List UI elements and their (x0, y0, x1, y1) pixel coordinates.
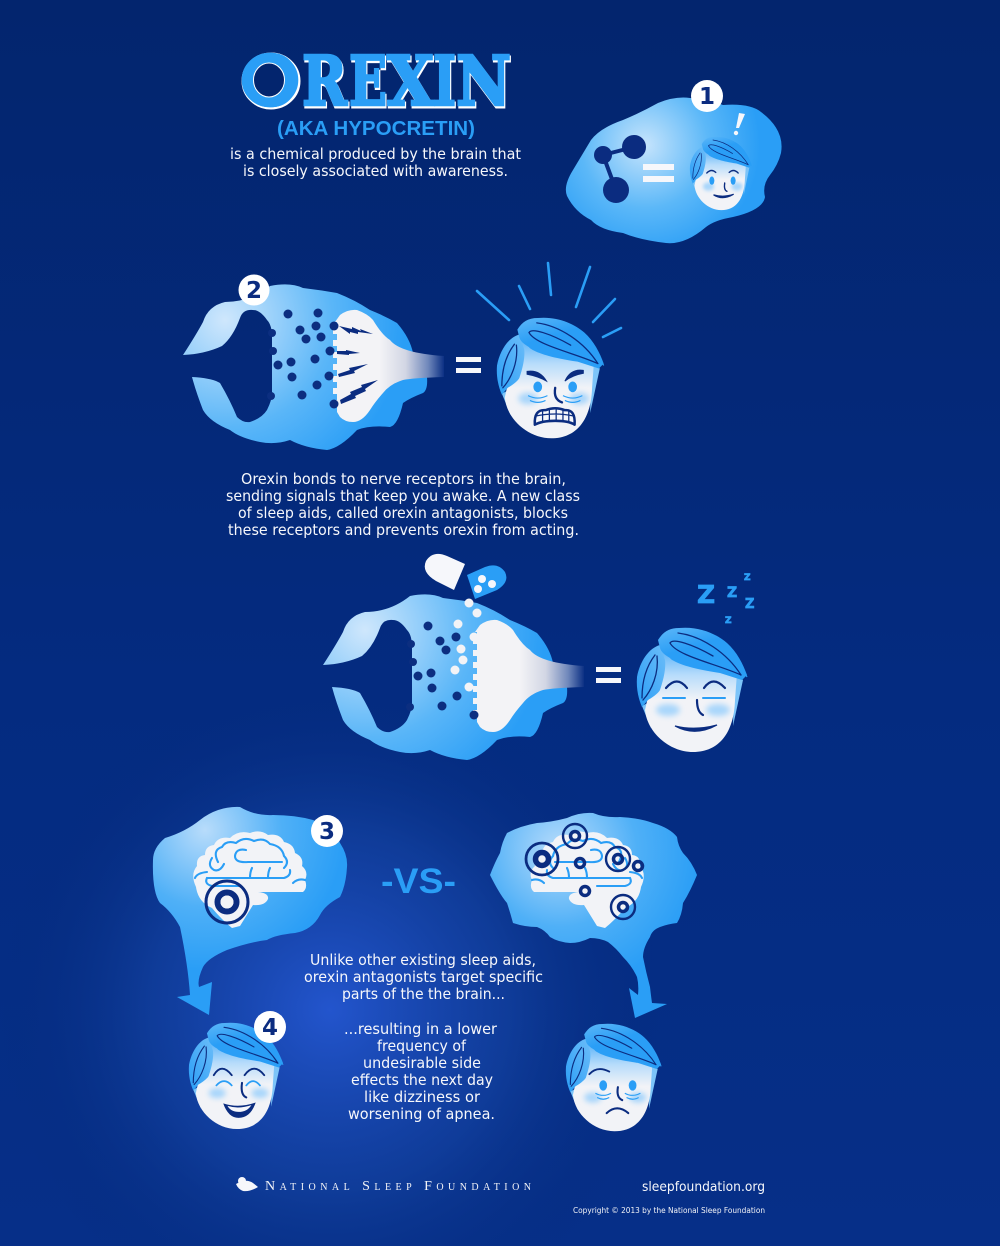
explanation text: these receptors and prevents orexin from acting. (228, 521, 579, 539)
icon: sleeping Zs: Z (744, 573, 751, 583)
copyright: Copyright © 2013 by the National Sleep Foundation (573, 1206, 765, 1215)
icon: wired awake face (497, 318, 604, 438)
side effects text: orexin antagonists target specific (304, 968, 543, 986)
side effects text: worsening of apnea. (348, 1105, 495, 1123)
side effects text: undesirable side (363, 1054, 481, 1072)
website: sleepfoundation.org (642, 1179, 765, 1195)
title: E (349, 42, 387, 122)
panel: targeted brain (153, 807, 347, 1015)
vs label: -VS- (381, 862, 456, 901)
icon: unhappy face (566, 1024, 661, 1131)
panel: scattered brain (490, 813, 697, 1018)
icon: orexin molecule (594, 135, 646, 203)
icon: sleeping Zs: Z (725, 616, 732, 626)
title: E (350, 44, 388, 124)
icon: alarm rays (477, 263, 621, 337)
icon: alert face (690, 137, 752, 210)
panel: step 1 blob (566, 80, 782, 243)
icon: brain with many targets (526, 824, 644, 928)
title: I (433, 42, 456, 122)
blocked orexin dots (406, 622, 478, 720)
badge 4: 4 (262, 1015, 278, 1041)
intro text: is closely associated with awareness. (243, 162, 508, 180)
side effects text: Unlike other existing sleep aids, (310, 951, 536, 969)
explanation text: sending signals that keep you awake. A new class (226, 487, 580, 505)
equals sign 2 (456, 357, 481, 373)
explanation text: Orexin bonds to nerve receptors in the brain, (241, 470, 566, 488)
panel: step 2 synapse (183, 284, 444, 450)
orexin dots (267, 308, 338, 408)
badge 3: 3 (319, 819, 335, 845)
foundation name: National Sleep Foundation (265, 1179, 531, 1194)
title: X (388, 44, 435, 124)
title: O (243, 42, 298, 122)
badge 3 (311, 815, 343, 847)
side effects text: frequency of (377, 1037, 467, 1055)
badge 4 (254, 1011, 286, 1043)
title (243, 42, 512, 124)
icon: sleeping Zs: Z (745, 597, 754, 612)
side effects text: ...resulting in a lower (344, 1020, 498, 1038)
lightning bolts (337, 326, 378, 404)
equals sign 1 (643, 164, 674, 182)
title: N (456, 42, 511, 122)
title: X (387, 42, 434, 122)
antagonist dots (450, 598, 482, 692)
icon: brain with one target (193, 831, 306, 928)
intro text: is a chemical produced by the brain that (230, 145, 521, 163)
explanation text: of sleep aids, called orexin antagonists, blocks (238, 504, 568, 522)
logo: sleeping figure (236, 1177, 258, 1191)
equals sign 3 (596, 667, 621, 683)
title: R (302, 42, 347, 122)
icon: sleeping Zs (697, 573, 754, 626)
title: N (457, 44, 512, 124)
subtitle: (AKA HYPOCRETIN) (277, 118, 475, 140)
icon: exclamation mark (734, 113, 745, 135)
title: I (434, 44, 457, 124)
badge 1 (691, 80, 723, 112)
badge 1: 1 (699, 84, 715, 110)
side effects text (304, 951, 543, 1123)
icon: sleepy face (637, 628, 747, 752)
icon: happy face (189, 1023, 283, 1129)
icon: opened pill (425, 554, 506, 599)
badge 2 (238, 274, 270, 306)
badge 2: 2 (246, 278, 262, 304)
intro text (230, 145, 521, 180)
panel: blocked synapse (323, 594, 584, 760)
side effects text: effects the next day (351, 1071, 493, 1089)
explanation text (226, 470, 580, 539)
icon: sleeping Zs: Z (697, 580, 715, 609)
icon: sleeping Zs: Z (727, 585, 737, 601)
side effects text: like dizziness or (364, 1088, 481, 1106)
title: R (303, 44, 348, 124)
side effects text: parts of the the brain... (342, 985, 505, 1003)
